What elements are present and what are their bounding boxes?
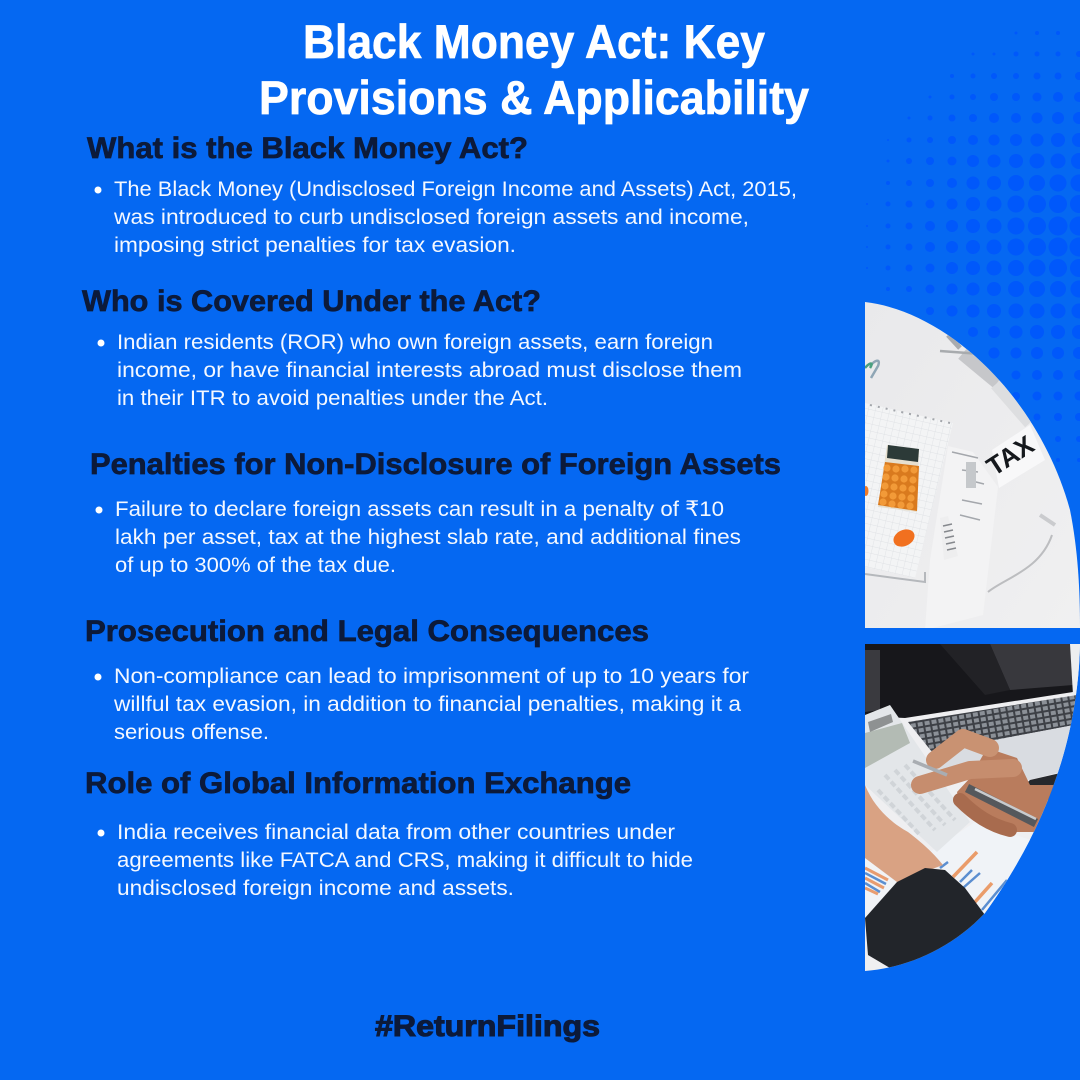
bullet point text: global information exchange: agreements like FATCA and CRS, making it difficult to hide [117, 848, 693, 872]
bullet point text: penalties: Failure to declare foreign assets can result in a penalty of ₹10 [115, 497, 724, 521]
bullet point text: penalties: lakh per asset, tax at the highest slab rate, and additional fines [115, 525, 741, 549]
section: global information exchange [85, 767, 693, 900]
bullet point text: what is the act [94, 177, 797, 257]
photo: tax papers and calculator [864, 300, 1080, 630]
bullet point text: global information exchange: undisclosed foreign income and assets. [117, 876, 514, 900]
section: what is the act [87, 132, 797, 257]
bullet point text: what is the act: imposing strict penalties for tax evasion. [114, 233, 516, 257]
title [259, 15, 809, 124]
section: who is covered [82, 285, 742, 410]
bullet point text: penalties: of up to 300% of the tax due. [115, 553, 396, 577]
hashtag footer: #ReturnFilings [375, 1010, 600, 1043]
bullet point text: who is covered: Indian residents (ROR) who own foreign assets, earn foreign [117, 330, 713, 354]
bullet point text: prosecution [94, 664, 749, 744]
section: prosecution [85, 615, 749, 744]
halftone dot pattern [866, 31, 1080, 462]
bullet point text: who is covered: in their ITR to avoid penalties under the Act. [117, 386, 548, 410]
title: Provisions & Applicability [259, 71, 809, 124]
heading: global information exchange: Role of Global Information Exchange [85, 767, 631, 800]
photo: hands using calculator with laptop [865, 644, 1080, 974]
bullet point text: who is covered: income, or have financial interests abroad must disclose them [117, 358, 742, 382]
heading: prosecution: Prosecution and Legal Consequences [85, 615, 649, 648]
bullet point text: prosecution: willful tax evasion, in addition to financial penalties, making it a [113, 692, 741, 716]
bullet point text: who is covered [98, 330, 742, 410]
section: penalties [90, 448, 781, 577]
bullet point text: penalties [96, 497, 741, 577]
bullet point text: global information exchange: India receives financial data from other countries under [117, 820, 675, 844]
photo: tax papers and calculator: TAX [981, 429, 1040, 482]
heading: penalties: Penalties for Non-Disclosure of Foreign Assets [90, 448, 781, 481]
title: Black Money Act: Key [303, 15, 765, 68]
bullet point text: what is the act: The Black Money (Undisclosed Foreign Income and Assets) Act, 2015, [114, 177, 797, 201]
bullet point text: what is the act: was introduced to curb undisclosed foreign assets and income, [113, 205, 749, 229]
bullet point text: global information exchange [98, 820, 693, 900]
heading: what is the act: What is the Black Money Act? [87, 132, 528, 165]
heading: who is covered: Who is Covered Under the Act? [82, 285, 541, 318]
bullet point text: prosecution: serious offense. [114, 720, 269, 744]
bullet point text: prosecution: Non-compliance can lead to imprisonment of up to 10 years for [114, 664, 749, 688]
